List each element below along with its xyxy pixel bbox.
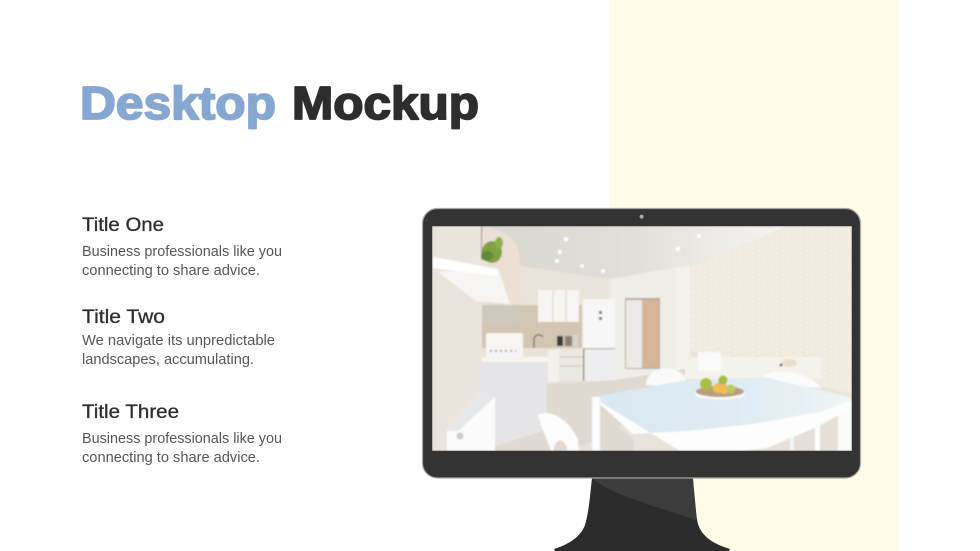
text block: title two: Title Two (82, 307, 165, 328)
monitor stand (554, 478, 730, 551)
fridge (583, 299, 615, 349)
text block: title one: Business professionals like you (82, 243, 282, 260)
front chair (538, 413, 579, 451)
text block: title three: Business professionals like you (82, 430, 282, 447)
ceiling (480, 226, 790, 279)
sink and appliances (557, 336, 563, 346)
backsplash (482, 305, 582, 348)
text block: title one (82, 215, 282, 279)
text block: title one: Title One (82, 215, 164, 236)
text block: title two (82, 307, 275, 368)
ceiling lights (555, 234, 701, 273)
back wall (520, 266, 610, 380)
curved column (482, 227, 520, 265)
title: Desktop (80, 77, 276, 129)
doorway (625, 298, 660, 369)
webcam (640, 215, 644, 219)
yellow background panel (609, 0, 898, 551)
text block: title one: connecting to share advice. (82, 262, 260, 279)
title: Mockup (292, 77, 479, 129)
title (80, 77, 479, 129)
lower cabinets (548, 350, 559, 382)
text block: title three: connecting to share advice. (82, 449, 260, 466)
microwave (486, 333, 523, 357)
text block: title three (82, 402, 282, 466)
back chairs (646, 368, 688, 386)
floor and chairs under table (600, 428, 634, 450)
desktop monitor mockup (422, 208, 860, 551)
monitor bezel (422, 208, 860, 478)
fruit bowl (694, 392, 745, 400)
screen: kitchen photo (432, 226, 852, 451)
upper cabinets (538, 290, 579, 322)
sofa (685, 357, 822, 379)
text block: title two: We navigate its unpredictable (82, 332, 275, 349)
floor (496, 368, 686, 450)
plant (481, 237, 503, 263)
text block: title two: landscapes, accumulating. (82, 351, 254, 368)
range hood shelf (438, 268, 510, 304)
left wall (432, 226, 482, 451)
table (592, 377, 852, 434)
brick wall (690, 226, 852, 394)
text block: title three: Title Three (82, 402, 179, 423)
radiator (447, 392, 495, 451)
counter and island (482, 357, 548, 362)
